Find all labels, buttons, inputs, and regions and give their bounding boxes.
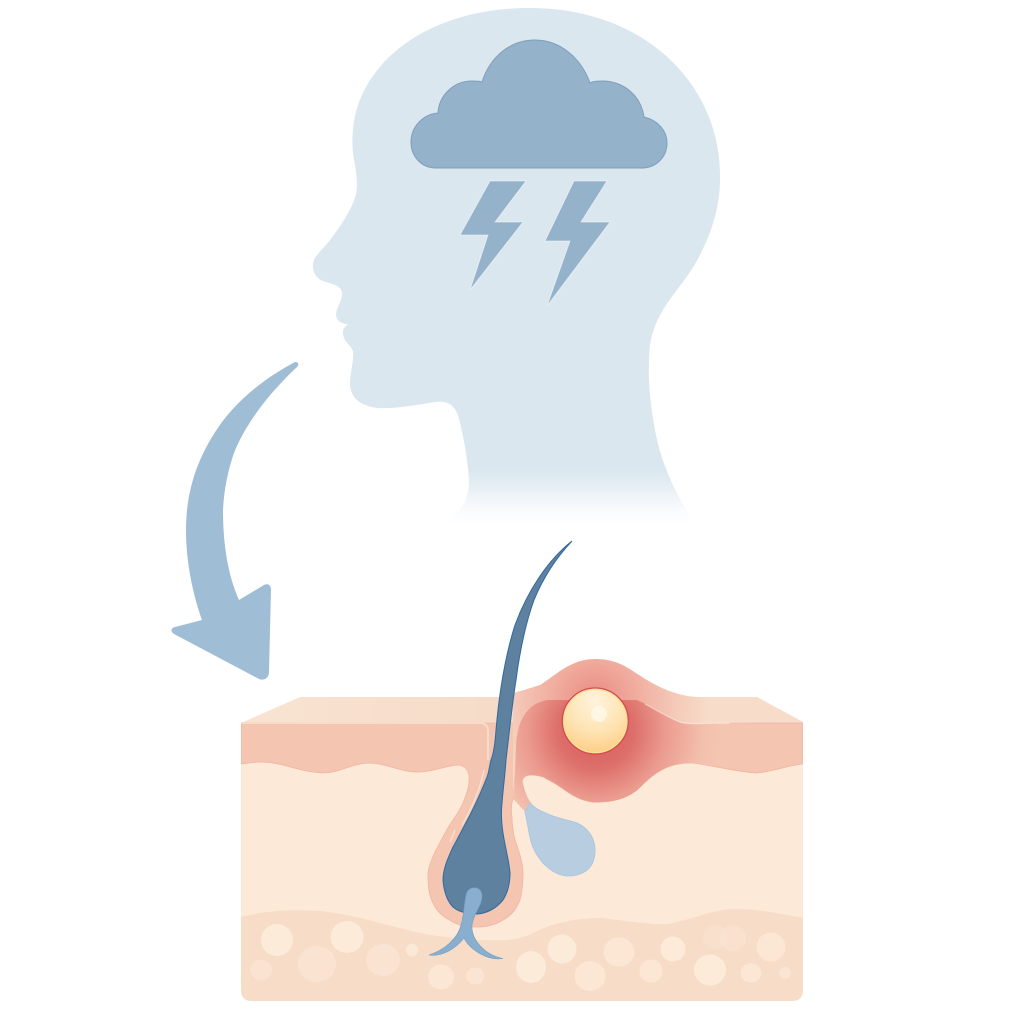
head silhouette: [313, 8, 720, 525]
epidermis and follicle sheath: [241, 723, 803, 927]
icon: storm cloud: [411, 40, 667, 168]
icon: lightning bolt right: [545, 181, 610, 306]
hair root papilla: [429, 888, 503, 959]
sebaceous gland: [525, 803, 595, 876]
icon: lightning bolt left: [460, 181, 526, 290]
pimple highlight: [591, 706, 607, 722]
infographic: stress leads to skin inflammation: [172, 8, 803, 1001]
epidermis highlight line: [241, 723, 488, 760]
inflamed tissue lower edge: [545, 769, 660, 802]
pimple pus ball: [562, 688, 628, 754]
pimple yellow rim: [564, 690, 627, 752]
inflamed bump surface: [513, 659, 803, 790]
fat cells: [250, 921, 791, 991]
hair and follicle shaft: [443, 541, 572, 914]
follicle sheath highlight: [450, 770, 484, 842]
skin top surface: [244, 697, 803, 723]
dermis layer: [241, 762, 803, 940]
arrow: from mind to skin: [171, 362, 298, 680]
inflamed tissue: [514, 700, 730, 812]
skin cross-section block: [241, 697, 803, 1001]
skin surface highlight over bump: [645, 704, 730, 724]
fat layer with cells: [241, 909, 803, 1001]
